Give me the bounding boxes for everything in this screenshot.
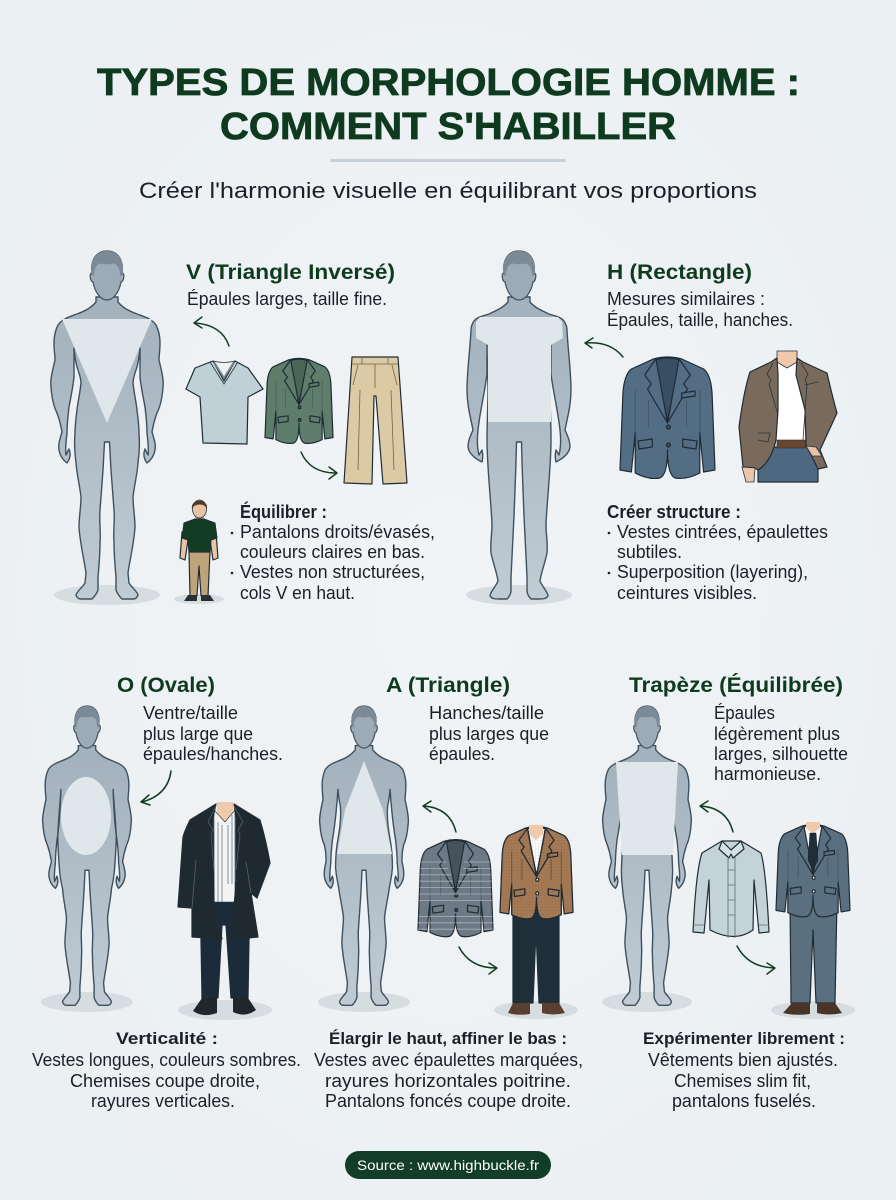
title: TYPES DE MORPHOLOGIE HOMME : bbox=[97, 62, 800, 104]
description trapèze bbox=[714, 703, 848, 784]
advice H: subtiles. bbox=[617, 542, 682, 562]
arrow: jacket to shoulders bbox=[585, 338, 623, 357]
arrow: shirt to shoulders bbox=[194, 317, 229, 346]
description A: épaules. bbox=[429, 744, 495, 764]
advice trapèze bbox=[643, 1029, 845, 1111]
description O bbox=[143, 703, 283, 764]
heading A: A (Triangle) bbox=[386, 674, 510, 697]
advice V: couleurs claires en bas. bbox=[240, 542, 425, 562]
icon: light shirt bbox=[693, 841, 769, 938]
title bbox=[97, 62, 800, 148]
advice H: Vestes cintrées, épaulettes bbox=[617, 522, 828, 542]
advice A bbox=[314, 1029, 583, 1111]
advice A: Vestes avec épaulettes marquées, bbox=[314, 1050, 583, 1070]
subtitle: Créer l'harmonie visuelle en équilibrant vos proportions bbox=[139, 178, 757, 203]
icon: blue jacket bbox=[620, 357, 715, 478]
advice trapèze: pantalons fuselés. bbox=[672, 1091, 816, 1111]
icon: beige trousers bbox=[344, 357, 407, 484]
description H: Mesures similaires : bbox=[607, 289, 765, 309]
icon: striped jacket bbox=[418, 840, 493, 937]
body figure trapèze bbox=[602, 706, 692, 1012]
icon: tan jacket outfit bbox=[494, 825, 578, 1019]
advice V bbox=[231, 501, 435, 603]
advice O: Vestes longues, couleurs sombres. bbox=[32, 1050, 301, 1070]
source badge bbox=[345, 1151, 551, 1179]
body figure H bbox=[466, 251, 572, 605]
description H bbox=[607, 289, 793, 330]
panel: H rectangle bbox=[466, 251, 837, 605]
advice V: Vestes non structurées, bbox=[240, 562, 425, 582]
advice V: cols V en haut. bbox=[240, 583, 355, 603]
description trapèze: Épaules bbox=[714, 703, 775, 723]
icon: green jacket bbox=[265, 358, 333, 443]
arrow: text to belly bbox=[141, 771, 171, 805]
heading H: H (Rectangle) bbox=[607, 261, 752, 284]
arrow: jacket to trousers bbox=[301, 452, 337, 479]
arrow: shirt to shoulders bbox=[700, 801, 733, 832]
advice H: Superposition (layering), bbox=[617, 562, 808, 582]
description V: Épaules larges, taille fine. bbox=[187, 289, 387, 309]
advice V: Pantalons droits/évasés, bbox=[240, 522, 435, 542]
source badge: Source : www.highbuckle.fr bbox=[357, 1157, 539, 1173]
panel: V triangle inversé bbox=[51, 251, 435, 605]
advice trapèze: Expérimenter librement : bbox=[643, 1029, 845, 1048]
advice V: Équilibrer : bbox=[240, 501, 327, 522]
advice O: rayures verticales. bbox=[91, 1091, 235, 1111]
advice O: Verticalité : bbox=[116, 1029, 218, 1048]
arrow: jacket to shoulders bbox=[423, 801, 456, 832]
icon: dark coat outfit bbox=[178, 802, 272, 1020]
advice A: rayures horizontales poitrine. bbox=[325, 1071, 571, 1091]
advice trapèze: Chemises slim fit, bbox=[674, 1071, 811, 1091]
description trapèze: larges, silhouette bbox=[714, 744, 848, 764]
icon: grey suit bbox=[771, 822, 855, 1019]
description O: plus large que bbox=[143, 724, 253, 744]
title: COMMENT S'HABILLER bbox=[220, 106, 676, 148]
description trapèze: harmonieuse. bbox=[714, 764, 821, 784]
advice O bbox=[32, 1029, 301, 1111]
heading V: V (Triangle Inversé) bbox=[186, 261, 395, 284]
description O: Ventre/taille bbox=[143, 703, 238, 723]
description H: Épaules, taille, hanches. bbox=[607, 310, 793, 330]
description A bbox=[429, 703, 549, 764]
description A: plus larges que bbox=[429, 724, 549, 744]
advice H bbox=[607, 502, 828, 603]
body figure A bbox=[318, 706, 410, 1012]
description A: Hanches/taille bbox=[429, 703, 544, 723]
advice H: Créer structure : bbox=[607, 502, 741, 522]
arrow: shirt to suit bbox=[737, 946, 775, 974]
icon: small man bbox=[174, 500, 224, 604]
advice O: Chemises coupe droite, bbox=[70, 1071, 260, 1091]
icon: v-neck t-shirt bbox=[186, 361, 263, 444]
heading O: O (Ovale) bbox=[117, 674, 215, 697]
panel: O ovale bbox=[32, 674, 301, 1111]
icon: man in brown jacket bbox=[739, 351, 837, 482]
description trapèze: légèrement plus bbox=[714, 724, 840, 744]
description O: épaules/hanches. bbox=[143, 744, 283, 764]
heading trapèze: Trapèze (Équilibrée) bbox=[629, 674, 843, 697]
body figure O bbox=[41, 706, 133, 1012]
arrow: jacket to trousers bbox=[459, 947, 497, 974]
panel: trapèze bbox=[602, 674, 855, 1111]
advice A: Élargir le haut, affiner le bas : bbox=[329, 1029, 567, 1048]
advice H: ceintures visibles. bbox=[617, 583, 757, 603]
panel: A triangle bbox=[314, 674, 583, 1111]
body figure V bbox=[51, 251, 163, 605]
advice trapèze: Vêtements bien ajustés. bbox=[648, 1050, 838, 1070]
advice A: Pantalons foncés coupe droite. bbox=[325, 1091, 571, 1111]
